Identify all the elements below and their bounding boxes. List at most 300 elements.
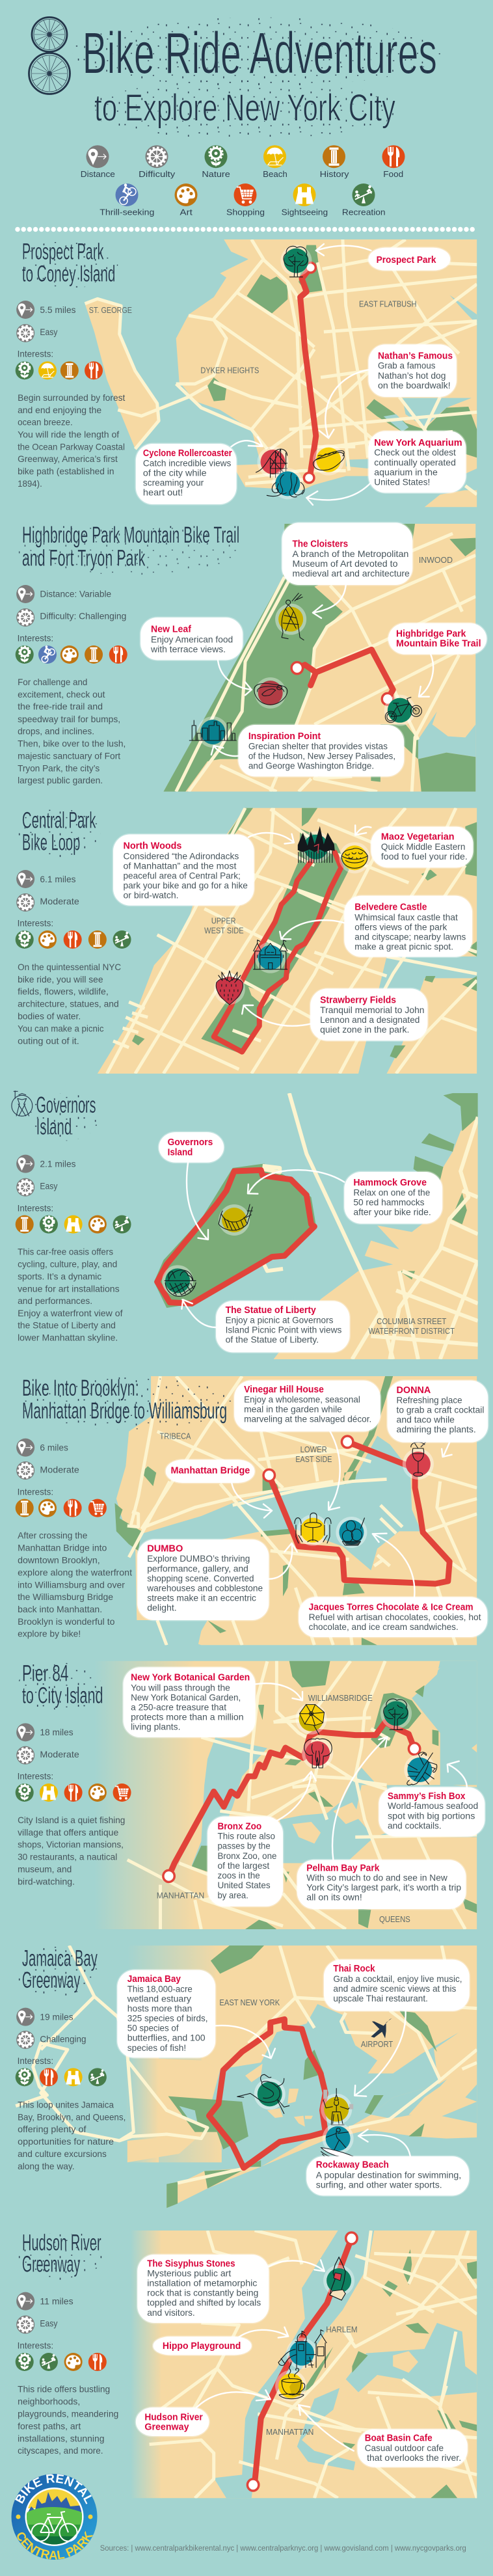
callout: DUMBO: performance, gallery, and — [147, 1563, 248, 1574]
callout: Rockaway Beach — [306, 2156, 469, 2195]
panel: Governors Island: Governors — [36, 1092, 96, 1118]
callout: Pelham Bay Park: all on its own! — [306, 1892, 362, 1903]
route — [163, 1722, 420, 1882]
map labels — [157, 1694, 410, 1924]
interests — [16, 1202, 131, 1234]
map labels: HARLEM — [326, 2325, 358, 2335]
illustration: ice cream — [336, 1517, 367, 1548]
description: into Williamsburg and over — [18, 1579, 125, 1590]
legend labels: Shopping — [226, 208, 265, 217]
panel: Hudson River Greenway — [16, 2230, 477, 2553]
route stats — [16, 2008, 86, 2049]
map — [85, 239, 477, 507]
illustration: hammock — [219, 1204, 252, 1236]
illustration: Thai dancer — [321, 2089, 353, 2125]
arrow — [239, 2327, 288, 2338]
description: speedway trail for bumps, — [18, 714, 120, 724]
callout: New York Botanical Garden: New York Botanical Garden — [131, 1672, 250, 1683]
route stats: Easy — [40, 327, 58, 337]
route stats: Easy — [40, 2318, 58, 2329]
description: You will ride the length of — [18, 429, 119, 440]
callout: Jamaica Bay: wetland estuary — [127, 1994, 191, 2004]
route — [214, 852, 341, 1052]
logo: Bike Rental Central Park: CENTRAL PARK — [17, 2531, 93, 2560]
legend labels: Nature — [202, 170, 230, 179]
callout: DUMBO: warehouses and cobblestone — [146, 1582, 263, 1593]
title and legend block — [72, 18, 444, 217]
illustration: playground — [278, 2330, 326, 2369]
description: and end enjoying the — [18, 405, 101, 415]
panel: Hudson River Greenway: Hudson River — [22, 2230, 101, 2255]
arrow — [242, 1005, 312, 1026]
callout: Jamaica Bay — [117, 1970, 215, 2057]
description: the Williamsburg Bridge — [18, 1592, 113, 1602]
panel: Central Park Bike Loop — [16, 808, 477, 1074]
illustration: castle — [254, 940, 287, 973]
map — [154, 1093, 478, 1359]
route stats: Difficulty: Challenging — [40, 611, 126, 621]
callout: New York Aquarium: aquarium in the — [374, 467, 438, 478]
description: offering plenty of — [18, 2124, 87, 2134]
description: village that offers antique — [18, 1827, 118, 1837]
callout: DONNA — [388, 1381, 488, 1443]
arrow — [269, 2260, 325, 2271]
description: explore along the waterfront — [18, 1567, 132, 1578]
route — [300, 263, 316, 483]
callout: Governors Island: Island — [168, 1146, 193, 1158]
description: downtown Brooklyn, — [18, 1554, 100, 1566]
interests: Interests: — [18, 632, 53, 644]
illustration: tree — [280, 245, 312, 277]
route stats: Distance: Variable — [40, 589, 111, 599]
map labels: QUEENS — [379, 1916, 410, 1924]
callout: New York Aquarium: continually operated — [374, 457, 456, 468]
arrow — [248, 1170, 344, 1194]
callout: North Woods: of Manhattan” and the most — [123, 861, 237, 871]
arrow — [276, 1772, 316, 1821]
arrow — [313, 585, 346, 618]
callout: Jamaica Bay: species of fish! — [127, 2042, 186, 2053]
description: Then, bike over to the lush, — [18, 738, 126, 749]
illustration: flower — [296, 1703, 327, 1735]
map labels — [266, 2325, 358, 2437]
callout: Cyclone Rollercoaster: screaming your — [143, 478, 204, 488]
route stats: 2.1 miles — [40, 1158, 76, 1169]
panel: Prospect Park to Coney Island — [16, 239, 477, 507]
heading — [18, 1661, 103, 1713]
arrow — [218, 660, 252, 695]
callout: Thai Rock — [324, 1960, 470, 2011]
legend icons — [86, 145, 405, 206]
illustration: Sisyphus stones — [323, 2257, 354, 2300]
callout: Vinegar Hill House: Vinegar Hill House — [244, 1383, 324, 1394]
title — [83, 21, 437, 129]
map labels: AIRPORT — [361, 2040, 393, 2049]
illustration: garden table — [295, 1513, 331, 1546]
callout: Prospect Park — [369, 248, 450, 271]
callout: North Woods: peaceful area of Central Park; — [123, 871, 241, 881]
heading: and Fort Tryon Park — [22, 546, 145, 571]
callout: Boat Basin Cafe: Boat Basin Cafe — [365, 2432, 433, 2443]
description: bodies of water. — [18, 1010, 81, 1022]
arrow — [187, 1163, 208, 1240]
callout: Jamaica Bay: 50 species of — [127, 2023, 179, 2033]
heading — [16, 808, 101, 858]
logo: Bike Rental Central Park — [12, 2474, 98, 2560]
illustration: bicycle — [384, 695, 421, 726]
callout: Manhattan Bridge: Manhattan Bridge — [170, 1465, 250, 1476]
callout: Boat Basin Cafe: Casual outdoor cafe — [365, 2443, 444, 2453]
panel: Bike Into Brooklyn — [16, 1376, 488, 1645]
arrow — [316, 244, 371, 256]
heading: Bike Loop — [22, 830, 80, 856]
route stats: 5.5 miles — [40, 305, 76, 315]
legend labels: Distance — [81, 170, 115, 179]
callout: Thai Rock: Thai Rock — [333, 1962, 375, 1973]
callout: Manhattan Bridge — [166, 1459, 255, 1483]
interests: Interests: — [18, 1202, 53, 1213]
arrow — [232, 1483, 272, 1518]
illustration: octopus — [267, 468, 304, 499]
callout: Vinegar Hill House: Enjoy a wholesome, seasonal — [244, 1394, 360, 1405]
map — [114, 1376, 477, 1645]
route — [263, 1436, 449, 1584]
callout: Cyclone Rollercoaster — [136, 444, 237, 504]
heading: Greenway — [22, 1968, 80, 1993]
description: back into Manhattan. — [18, 1604, 102, 1614]
panel: Central Park Bike Loop: Central Park — [22, 808, 96, 834]
route stats: Easy — [40, 1180, 58, 1191]
route stats — [16, 585, 126, 627]
callout: Strawberry Fields: Tranquil memorial to John — [320, 1005, 425, 1015]
arrow — [419, 655, 433, 697]
heading — [18, 239, 118, 288]
callout: Nathan's Famous: on the boardwalk! — [378, 380, 451, 390]
route stats — [16, 1155, 76, 1197]
callout: Nathan's Famous — [369, 344, 457, 397]
route stats: 6.1 miles — [40, 874, 76, 884]
callout: Hippo Playground: Hippo Playground — [163, 2340, 241, 2351]
callout: Strawberry Fields — [310, 988, 427, 1040]
callout: Bronx Zoo — [207, 1817, 283, 1906]
callout: The Sisyphus Stones — [137, 2255, 269, 2323]
illustration: steak — [254, 677, 287, 709]
description: the Statue of Liberty and — [18, 1320, 116, 1331]
description: Brooklyn is wonderful to — [18, 1616, 114, 1627]
illustration: hot dog — [313, 444, 344, 476]
arrow — [328, 1431, 340, 1510]
legend labels: History — [320, 170, 349, 179]
description: Greenway, America’s first — [18, 454, 118, 464]
description — [18, 392, 126, 489]
description: excitement, check out — [18, 689, 105, 699]
illustration: coffee cup — [275, 2363, 306, 2402]
callout: The Statue of Liberty: Enjoy a picnic at Governors — [226, 1314, 334, 1325]
callout: Vinegar Hill House — [234, 1381, 380, 1431]
map labels: EAST SIDE — [295, 1456, 332, 1464]
callout: The Cloisters: medieval art and architecture — [293, 568, 410, 578]
map labels: TRIBECA — [160, 1432, 191, 1441]
arrow — [442, 1443, 452, 1457]
description — [18, 962, 121, 1046]
illustration: surfer — [321, 2123, 358, 2162]
description: the Ocean Parkway Coastal — [18, 441, 125, 452]
interests — [16, 2340, 107, 2371]
callout: New York Botanical Garden — [123, 1667, 256, 1737]
description: playgrounds, meandering — [18, 2408, 118, 2419]
callout: Hammock Grove: Hammock Grove — [353, 1176, 427, 1187]
description: neighborhoods, — [18, 2396, 80, 2407]
callout: Bronx Zoo: Bronx Zoo — [217, 1821, 261, 1832]
arrow — [196, 2390, 271, 2407]
description: sports. It’s a dynamic — [18, 1271, 101, 1282]
description: cityscapes, and more. — [18, 2445, 103, 2456]
callout: New York Aquarium: United States! — [374, 476, 430, 487]
arrow — [355, 825, 371, 835]
description: installations, stunning — [18, 2433, 104, 2444]
interests — [16, 918, 131, 949]
callout: Governors Island: Governors — [168, 1136, 213, 1147]
illustration: elephant — [302, 1738, 333, 1769]
route — [247, 2232, 357, 2491]
legend labels: Beach — [263, 170, 287, 179]
callout: North Woods: park your bike and go for a hike — [123, 880, 248, 891]
route — [157, 1170, 314, 1303]
description: City Island is a quiet fishing — [18, 1815, 125, 1825]
callout: Belvedere Castle: Belvedere Castle — [354, 901, 427, 912]
callout: Nathan's Famous: Nathan’s hot dog — [378, 370, 446, 381]
description: After crossing the — [18, 1530, 87, 1541]
callout: New York Aquarium — [369, 431, 466, 493]
callout: Jacques Torres — [299, 1597, 487, 1637]
heading: Island — [36, 1115, 72, 1139]
route stats: Moderate — [40, 896, 79, 906]
interests: Interests: — [18, 349, 53, 359]
callout: Hammock Grove: after your bike ride. — [353, 1207, 431, 1217]
legend labels: Sightseeing — [282, 208, 328, 217]
description: largest public garden. — [18, 775, 103, 785]
description: explore by bike! — [18, 1629, 81, 1639]
callout: Prospect Park: Prospect Park — [377, 254, 436, 265]
description: This loop unites Jamaica — [18, 2099, 114, 2110]
illustration: tree — [380, 1698, 412, 1729]
callout: Rockaway Beach: Rockaway Beach — [316, 2159, 389, 2170]
map — [131, 2230, 477, 2498]
panel: Pier 84 to City Island — [16, 1661, 485, 1929]
description — [18, 2099, 126, 2171]
callout: Hudson River Greenway: Greenway — [144, 2421, 189, 2432]
route stats: 6 miles — [40, 1442, 68, 1453]
arrow — [373, 1534, 414, 1597]
description: the free-ride trail and — [18, 701, 103, 712]
arrow — [269, 1543, 297, 1579]
description: along the way. — [18, 2161, 75, 2171]
callout: Hammock Grove: Relax on one of the — [353, 1187, 430, 1198]
callout: Nathan's Famous: Grab a famous — [378, 360, 436, 371]
description: and performances. — [18, 1295, 92, 1306]
map labels: ST. GEORGE — [89, 306, 132, 315]
map labels: EAST FLATBUSH — [359, 300, 416, 309]
callout: Cyclone Rollercoaster: Cyclone Rollercoaster — [143, 447, 232, 458]
panel: Prospect Park to Coney Island: to Coney Island — [22, 262, 115, 286]
callout: Hudson River Greenway — [136, 2407, 209, 2436]
legend labels: Thrill-seeking — [100, 208, 154, 217]
callout: Boat Basin Cafe — [358, 2429, 468, 2467]
map labels: DYKER HEIGHTS — [200, 366, 259, 375]
description — [18, 677, 126, 785]
description: shops, Victorian mansions, — [18, 1839, 124, 1850]
callout: Bronx Zoo: This route also — [217, 1831, 275, 1841]
callout: The Statue of Liberty: The Statue of Liberty — [226, 1304, 316, 1315]
callout: Cyclone Rollercoaster: of the city while — [143, 468, 207, 478]
callout: Governors Island — [159, 1132, 224, 1163]
description: venue for art installations — [18, 1283, 120, 1294]
description — [18, 1815, 125, 1887]
callout: The Statue of Liberty: Island Picnic Point with views — [226, 1324, 342, 1335]
callout: New York Botanical Garden: living plants. — [131, 1721, 180, 1732]
panel: Jamaica Bay Greenway: Jamaica Bay — [22, 1946, 98, 1972]
route stats — [16, 301, 76, 342]
description: Tryon Park, the city’s — [18, 763, 100, 774]
callout: Sammy's Fish Box: and cocktails. — [388, 1820, 442, 1831]
callout: Inspiration Point: Grecian shelter that provides vistas — [248, 741, 388, 752]
heading: Greenway — [22, 2252, 80, 2277]
illustration: statue — [275, 593, 306, 640]
callout: New York Botanical Garden: a 250-acre treasure that — [131, 1702, 226, 1713]
description: forest paths, art — [18, 2420, 81, 2432]
description: Enjoy a waterfront view of — [18, 1308, 123, 1318]
legend labels: Art — [180, 208, 193, 217]
callout: New Leaf: with terrace views. — [150, 644, 226, 655]
map — [163, 524, 475, 792]
arrow — [248, 833, 294, 844]
route stats: 18 miles — [40, 1727, 73, 1737]
callout: DONNA: Refreshing place — [397, 1394, 462, 1405]
route stats: Moderate — [40, 1749, 79, 1759]
illustration: heron — [237, 2074, 289, 2113]
callout: Maoz Vegetarian: Maoz Vegetarian — [381, 831, 454, 842]
callout: Sammy's Fish Box — [379, 1787, 485, 1836]
callout: New Leaf — [140, 617, 243, 660]
illustration: forest — [298, 826, 335, 863]
icon: airplane — [371, 2018, 392, 2039]
description: For challenge and — [18, 677, 87, 687]
interests — [16, 1771, 131, 1802]
description: 30 restaurants, a nautical — [18, 1852, 117, 1862]
description: cycling, culture, play, and — [18, 1258, 117, 1269]
description: opportunities for nature — [18, 2136, 114, 2147]
description: On the quintessential NYC — [18, 962, 121, 972]
description: bike ride, you will see — [18, 974, 103, 984]
illustration: cocktail — [403, 1437, 434, 1480]
callout: Bronx Zoo: Bronx Zoo, one — [217, 1851, 276, 1861]
map labels: MANHATTAN — [157, 1891, 204, 1901]
route stats: 11 miles — [40, 2296, 73, 2307]
description: majestic sanctuary of Fort — [18, 750, 120, 761]
callout: DONNA: and taco while — [397, 1415, 455, 1425]
heading — [30, 1092, 99, 1141]
callout: Hammock Grove: 50 red hammocks — [353, 1197, 425, 1208]
interests — [16, 1486, 107, 1517]
callout: New York Botanical Garden: New York Botanical Garden, — [131, 1692, 241, 1703]
callout: New Leaf: Enjoy American food — [151, 634, 233, 645]
description: Begin surrounded by forest — [18, 392, 126, 403]
callout: Nathan's Famous: Nathan’s Famous — [378, 350, 453, 361]
description — [18, 1247, 123, 1343]
icon: Statue of Liberty — [12, 1091, 33, 1116]
map labels — [89, 300, 416, 375]
arrow — [354, 2011, 406, 2096]
panel: Governors Island — [12, 1091, 478, 1359]
interests: Interests: — [18, 918, 53, 929]
description: ocean breeze. — [18, 417, 73, 427]
callout: New York Botanical Garden: protects more than a million — [131, 1711, 244, 1722]
heading — [16, 1946, 101, 1996]
icon: bicycle wheels — [29, 17, 70, 94]
illustration: rollercoaster — [256, 446, 289, 478]
callout: The Sisyphus Stones: Mysterious public art — [147, 2268, 231, 2279]
map labels: MANHATTAN — [266, 2428, 313, 2437]
callout: Belvedere Castle — [344, 896, 472, 957]
description: bike path (established in — [18, 466, 114, 476]
callout: The Cloisters — [282, 522, 412, 585]
callout: Hudson River Greenway: Hudson River — [144, 2411, 203, 2422]
callout: Cyclone Rollercoaster: Catch incredible views — [143, 458, 232, 468]
map labels: WEST SIDE — [204, 927, 244, 936]
panel: Pier 84 to City Island: to City Island — [22, 1683, 103, 1708]
arrow — [358, 2130, 410, 2156]
callout: DUMBO: DUMBO — [147, 1543, 183, 1554]
map labels: LOWER — [300, 1446, 327, 1454]
callout: Vinegar Hill House: meal in the garden while — [244, 1404, 342, 1415]
route — [209, 2019, 325, 2168]
map — [94, 1661, 477, 1929]
description: museum, and — [18, 1864, 72, 1875]
description: Manhattan Bridge into — [18, 1543, 107, 1553]
callout: Bronx Zoo: passes by the — [217, 1841, 271, 1851]
callout: DUMBO: delight. — [147, 1602, 177, 1613]
description: architecture, statues, and — [18, 999, 119, 1009]
callout: Bronx Zoo: of the largest — [217, 1860, 269, 1871]
description: This ride offers bustling — [18, 2384, 110, 2394]
route stats: Moderate — [40, 1464, 79, 1475]
description: outing out of it. — [18, 1035, 79, 1046]
heading — [18, 522, 244, 575]
description: This car-free oasis offers — [18, 1247, 113, 1257]
map labels: EAST NEW YORK — [219, 1999, 280, 2007]
callout: Jamaica Bay: butterflies, and 100 — [127, 2033, 206, 2043]
arrow — [306, 483, 371, 505]
heading: Pier 84 — [22, 1661, 68, 1686]
legend labels: Difficulty — [139, 170, 176, 179]
interests: Interests: — [18, 2340, 53, 2351]
callout: Hippo Playground — [153, 2337, 252, 2355]
map labels: UPPER — [211, 917, 236, 926]
callout: Cyclone Rollercoaster: heart out! — [143, 487, 183, 498]
description: 1894). — [18, 478, 42, 489]
callout: Vinegar Hill House: marveling at the salvaged décor. — [244, 1414, 371, 1424]
arrow — [299, 2405, 354, 2451]
arrow — [319, 370, 369, 438]
callout: DUMBO: shopping scene. Converted — [147, 1573, 254, 1584]
callout: Jamaica Bay: hosts more than — [127, 2003, 192, 2014]
map labels — [160, 1432, 332, 1464]
callout: The Statue of Liberty — [216, 1301, 350, 1352]
callout: North Woods — [113, 834, 254, 906]
callout: Rockaway Beach: surfing, and other water sports. — [316, 2179, 442, 2190]
logo: Bike Rental Central Park: BIKE RENTAL — [15, 2474, 92, 2504]
description — [18, 1530, 132, 1639]
